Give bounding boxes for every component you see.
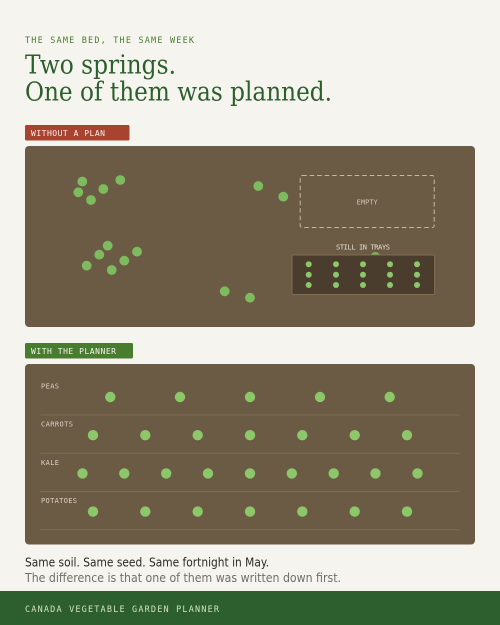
footer <box>0 591 500 625</box>
row: peas: PEAS <box>41 382 59 390</box>
tag: with the planner: WITH THE PLANNER <box>31 347 116 356</box>
closing statement <box>24 556 341 585</box>
row: kale: KALE <box>41 459 59 467</box>
closing statement: Same soil. Same seed. Same fortnight in May. <box>25 556 269 570</box>
row: potatoes <box>41 497 412 517</box>
tag: without a plan: WITHOUT A PLAN <box>31 129 105 138</box>
eyebrow: THE SAME BED, THE SAME WEEK <box>25 36 195 46</box>
row: peas <box>41 382 395 402</box>
row: kale <box>41 459 423 479</box>
closing statement: The difference is that one of them was written down first. <box>24 571 341 585</box>
title: One of them was planned. <box>25 78 332 108</box>
empty patch <box>300 176 434 228</box>
title <box>25 50 332 108</box>
empty patch: EMPTY <box>357 198 379 206</box>
panel: without a plan <box>25 146 475 327</box>
title: Two springs. <box>25 50 176 80</box>
row: carrots <box>41 421 412 440</box>
footer: CANADA VEGETABLE GARDEN PLANNER <box>25 605 220 615</box>
tag: with the planner <box>25 343 133 358</box>
seedlings: scattered <box>73 175 380 303</box>
panel: with the planner <box>25 364 475 544</box>
label: still in trays: STILL IN TRAYS <box>336 244 390 252</box>
seed tray <box>292 255 434 294</box>
row: potatoes: POTATOES <box>41 497 77 505</box>
row: carrots: CARROTS <box>41 421 73 429</box>
tag: without a plan <box>25 125 130 140</box>
